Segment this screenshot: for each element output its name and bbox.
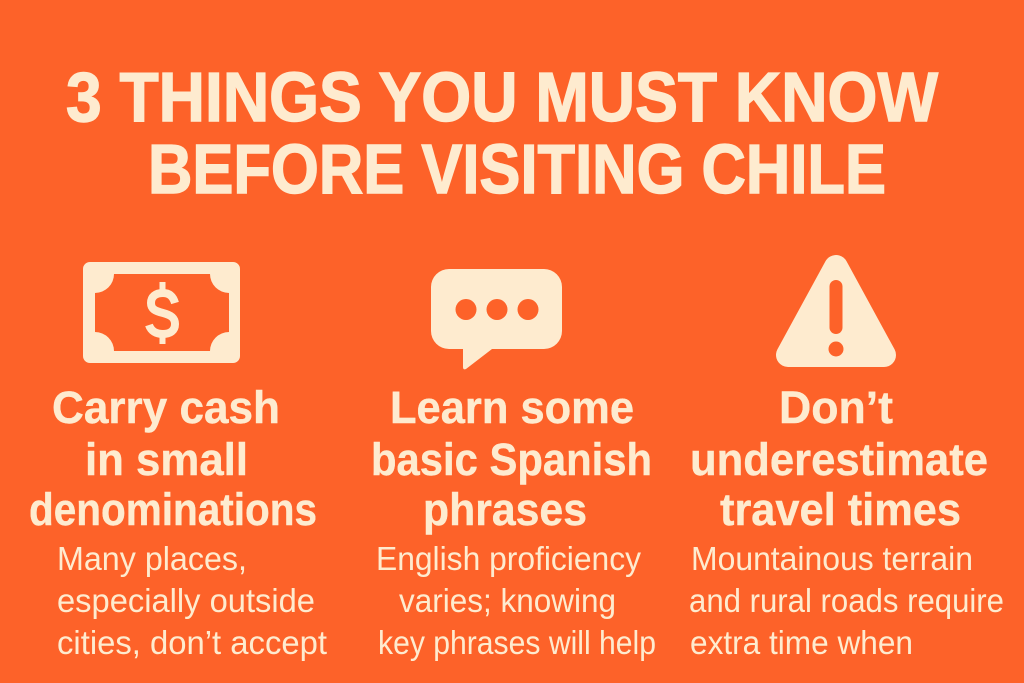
heading: travel times — [690, 382, 988, 535]
title: 3 THINGS YOU MUST KNOW — [66, 58, 938, 136]
text: learn spanish description: varies; knowing — [399, 582, 616, 619]
title — [66, 58, 938, 208]
text: travel times description — [689, 540, 1004, 661]
text: travel times description: extra time when — [690, 624, 913, 661]
heading: learn spanish: Learn some — [390, 382, 634, 433]
icon: warning triangle — [788, 267, 884, 356]
text: learn spanish description — [376, 540, 656, 661]
text: carry cash description: especially outside — [57, 582, 315, 619]
heading: carry cash: denominations — [29, 484, 317, 535]
heading: learn spanish — [371, 382, 652, 535]
text: carry cash description: cities, don’t accept — [57, 624, 327, 661]
panel: learn spanish — [371, 269, 656, 661]
heading: learn spanish: basic Spanish — [371, 434, 652, 485]
heading: carry cash — [29, 382, 317, 535]
icon: banknote — [83, 262, 240, 363]
text: learn spanish description: key phrases will help — [378, 624, 656, 661]
text: carry cash description — [57, 540, 327, 661]
panel: carry cash — [29, 262, 327, 661]
heading: learn spanish: phrases — [423, 484, 587, 535]
panel: travel times — [689, 267, 1004, 661]
title: BEFORE VISITING CHILE — [148, 130, 886, 208]
heading: travel times: travel times — [720, 484, 961, 535]
heading: travel times: underestimate — [690, 434, 988, 485]
text: travel times description: and rural roads require — [689, 582, 1004, 619]
heading: carry cash: Carry cash — [52, 382, 280, 433]
text: travel times description: Mountainous terrain — [691, 540, 973, 577]
icon: speech bubble — [431, 269, 562, 369]
heading: travel times: Don’t — [779, 382, 893, 433]
text: carry cash description: Many places, — [57, 540, 247, 577]
heading: carry cash: in small — [85, 434, 248, 485]
text: learn spanish description: English proficiency — [376, 540, 641, 577]
